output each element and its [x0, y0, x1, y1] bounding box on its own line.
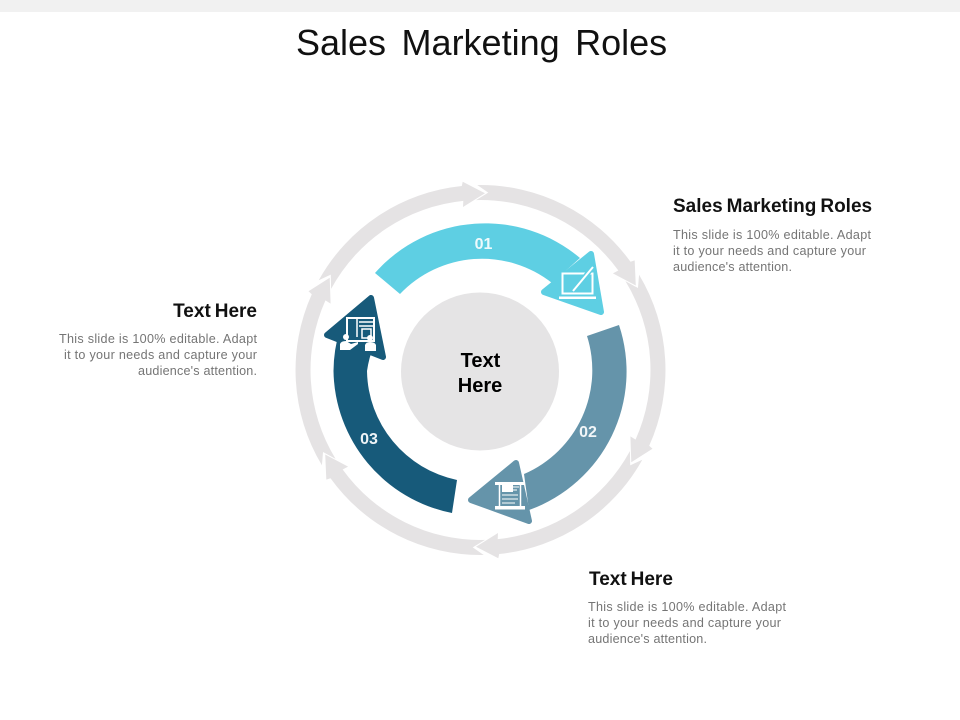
icon: laptop and pen: [559, 267, 596, 299]
text block: top right: Sales Marketing Roles: [673, 196, 872, 217]
label 03: 03: [360, 431, 378, 448]
text block: top right: it to your needs and capture your: [673, 244, 866, 258]
text block: top right: [673, 196, 872, 274]
text block: top right: audience's attention.: [673, 260, 792, 274]
text block: top right: This slide is 100% editable. Adapt: [673, 228, 872, 242]
label 01: 01: [475, 236, 492, 253]
text block: left: [59, 301, 258, 378]
label 02: 02: [579, 424, 597, 441]
icon: scroll document: [495, 482, 525, 510]
grey arrow: bottom: [476, 451, 642, 558]
text block: bottom: Text Here: [589, 569, 673, 590]
text block: left: Text Here: [173, 301, 257, 322]
grey arrow: top: [319, 182, 485, 289]
arrow 03: [327, 298, 457, 513]
grey arrow: lower left: [315, 407, 491, 604]
grey arrow: upper left: [237, 272, 413, 470]
grey arrow: lower right: [548, 270, 724, 468]
arrow 02: [471, 325, 627, 521]
centre circle: Here: [458, 375, 502, 397]
text block: bottom: [588, 569, 786, 646]
text block: bottom: audience's attention.: [588, 632, 707, 646]
arrow 01: [375, 223, 601, 312]
text block: left: it to your needs and capture your: [64, 348, 257, 362]
grey arrow: upper right: [470, 136, 646, 333]
title: Sales Marketing Roles: [296, 22, 667, 63]
centre circle: [401, 292, 559, 450]
centre circle: Text: [461, 350, 501, 372]
text block: left: audience's attention.: [138, 364, 257, 378]
text block: bottom: it to your needs and capture your: [588, 616, 781, 630]
icon: people at a board: [340, 318, 376, 351]
text block: left: This slide is 100% editable. Adapt: [59, 332, 258, 346]
outer ring of grey arrows: [237, 136, 724, 604]
text block: bottom: This slide is 100% editable. Adapt: [588, 600, 786, 614]
